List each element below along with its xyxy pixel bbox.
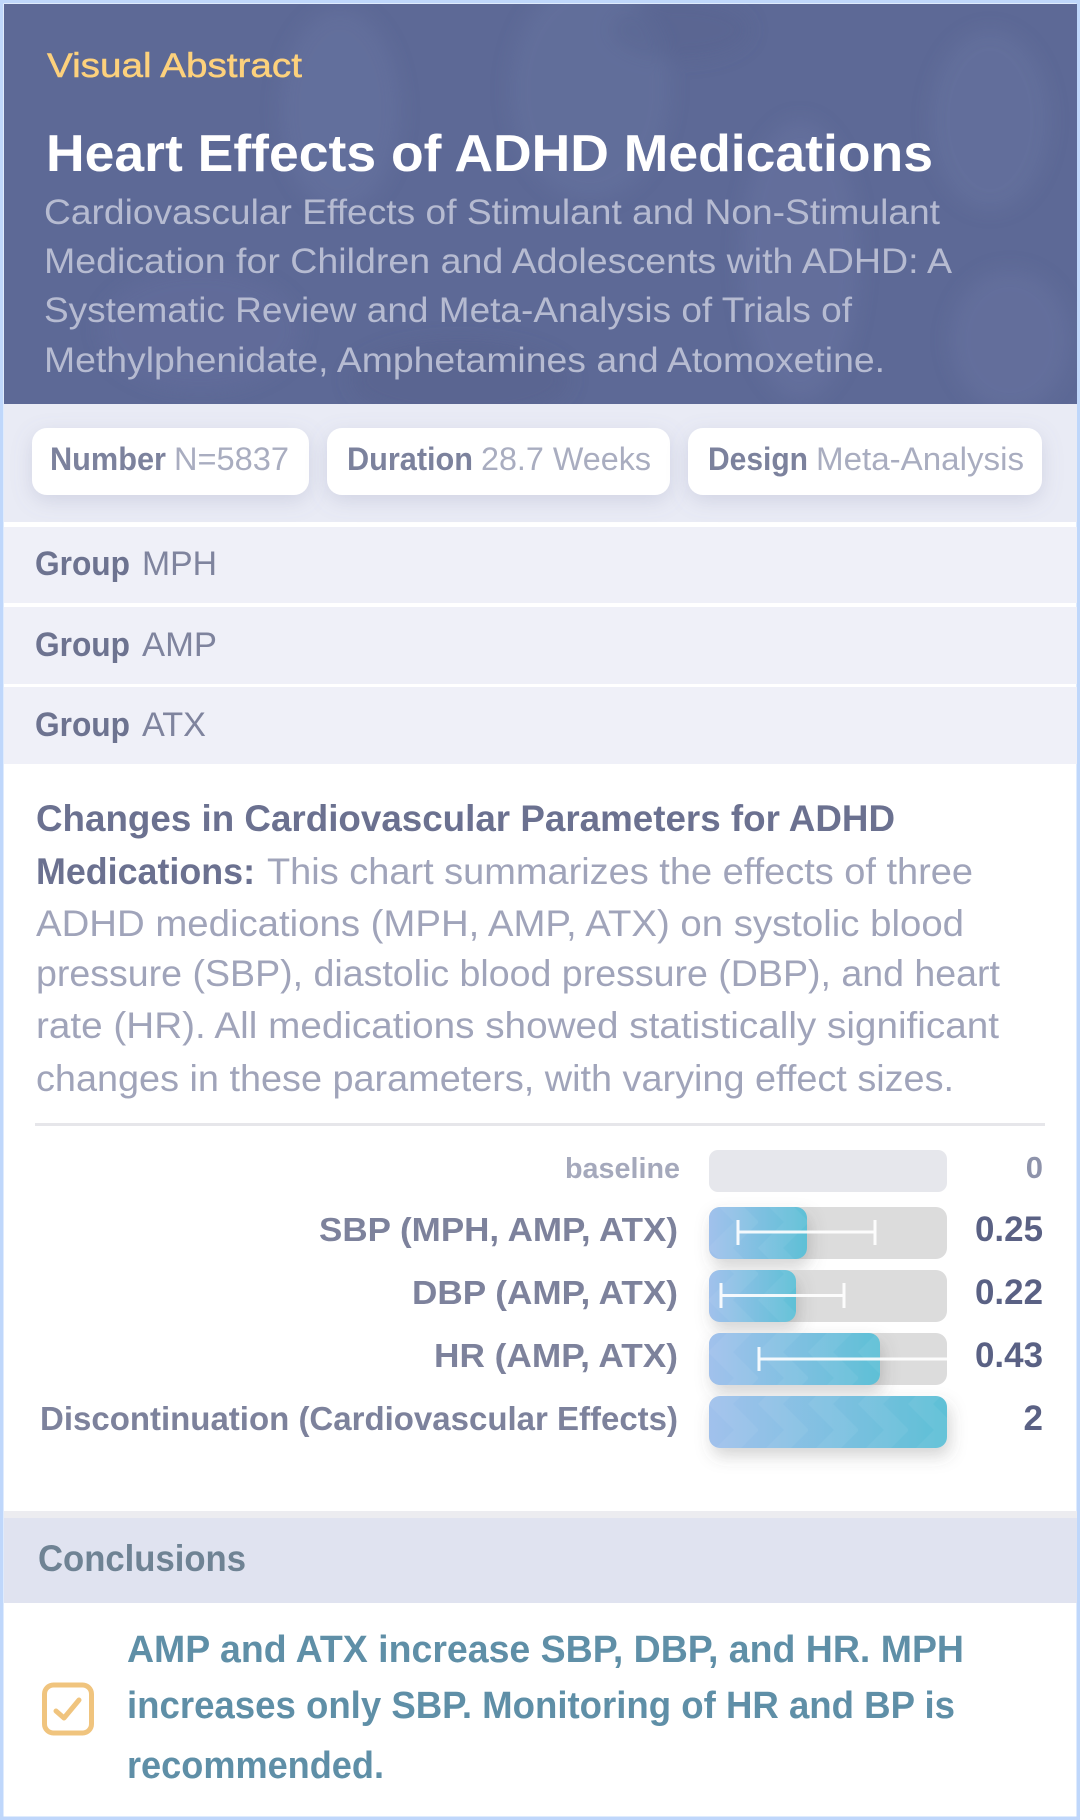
row: SBP bbox=[319, 1207, 1043, 1259]
row: baseline: baseline bbox=[565, 1153, 680, 1185]
icon: check box bbox=[44, 1685, 92, 1733]
panel: conclusions heading bbox=[4, 1511, 1077, 1603]
panel: group AMP: AMP bbox=[142, 626, 217, 664]
panel: group MPH: Group bbox=[35, 545, 130, 583]
row: discontinuation: Discontinuation (Cardiovascular Effects) bbox=[40, 1400, 678, 1437]
text block: chart description: Medications: bbox=[36, 851, 255, 892]
text block: conclusion: AMP and ATX increase SBP, DBP, and HR. MPH bbox=[127, 1629, 964, 1671]
text block: chart description: This chart summarizes the effects of three bbox=[267, 851, 973, 892]
row: discontinuation bbox=[40, 1396, 1043, 1448]
row: HR: HR (AMP, ATX) bbox=[434, 1337, 678, 1374]
pill: duration: Duration bbox=[347, 441, 473, 477]
pill: design bbox=[688, 428, 1042, 495]
panel: group MPH bbox=[4, 527, 1077, 603]
panel: group ATX bbox=[4, 687, 1077, 764]
row: HR bbox=[434, 1333, 1043, 1385]
text block: chart description: pressure (SBP), diastolic blood pressure (DBP), and heart bbox=[36, 953, 1001, 994]
panel: study stats bbox=[4, 404, 1077, 522]
header label: Visual Abstract bbox=[47, 47, 303, 85]
pill: duration: 28.7 Weeks bbox=[481, 441, 651, 477]
text block: conclusion: recommended. bbox=[127, 1745, 384, 1787]
panel: group MPH: MPH bbox=[142, 545, 217, 583]
text block: chart description: changes in these parameters, with varying effect sizes. bbox=[36, 1058, 954, 1099]
pill: number: Number bbox=[50, 441, 166, 477]
subtitle: Methylphenidate, Amphetamines and Atomoxetine. bbox=[44, 341, 885, 380]
row: DBP: 0.22 bbox=[975, 1273, 1043, 1312]
row: HR: 0.43 bbox=[975, 1336, 1043, 1375]
pill: duration bbox=[327, 428, 670, 495]
row: SBP: 0.25 bbox=[975, 1210, 1043, 1249]
panel: conclusions heading: Conclusions bbox=[38, 1538, 246, 1579]
panel: group ATX: ATX bbox=[142, 706, 206, 744]
text block: chart description: Changes in Cardiovascular Parameters for ADHD bbox=[36, 798, 895, 839]
row: DBP bbox=[412, 1270, 1043, 1322]
text block: chart description: ADHD medications (MPH, AMP, ATX) on systolic blood bbox=[36, 903, 964, 944]
panel: group AMP: Group bbox=[35, 626, 130, 664]
text block: conclusion bbox=[127, 1629, 964, 1787]
panel: header bbox=[4, 0, 1077, 420]
row: SBP: SBP (MPH, AMP, ATX) bbox=[319, 1211, 678, 1248]
subtitle: Medication for Children and Adolescents with ADHD: A bbox=[44, 242, 953, 281]
title: Heart Effects of ADHD Medications bbox=[46, 125, 933, 183]
panel: group AMP bbox=[4, 607, 1077, 684]
pill: design: Design bbox=[708, 441, 808, 477]
bar chart bbox=[40, 1150, 1043, 1448]
row: DBP: DBP (AMP, ATX) bbox=[412, 1274, 678, 1311]
subtitle: Systematic Review and Meta-Analysis of Trials of bbox=[44, 291, 852, 330]
pill: number: N=5837 bbox=[174, 441, 289, 477]
row: baseline: 0 bbox=[1026, 1150, 1043, 1185]
text block: chart description: rate (HR). All medications showed statistically significant bbox=[36, 1005, 1000, 1046]
pill: number bbox=[32, 428, 309, 495]
text block: chart description bbox=[36, 798, 1001, 1099]
row: discontinuation: 2 bbox=[1024, 1399, 1043, 1438]
row: baseline bbox=[565, 1150, 1043, 1192]
pill: design: Meta-Analysis bbox=[816, 441, 1024, 477]
text block: conclusion: increases only SBP. Monitoring of HR and BP is bbox=[127, 1685, 955, 1727]
panel: group ATX: Group bbox=[35, 706, 130, 744]
subtitle bbox=[44, 193, 953, 380]
subtitle: Cardiovascular Effects of Stimulant and Non-Stimulant bbox=[44, 193, 940, 232]
